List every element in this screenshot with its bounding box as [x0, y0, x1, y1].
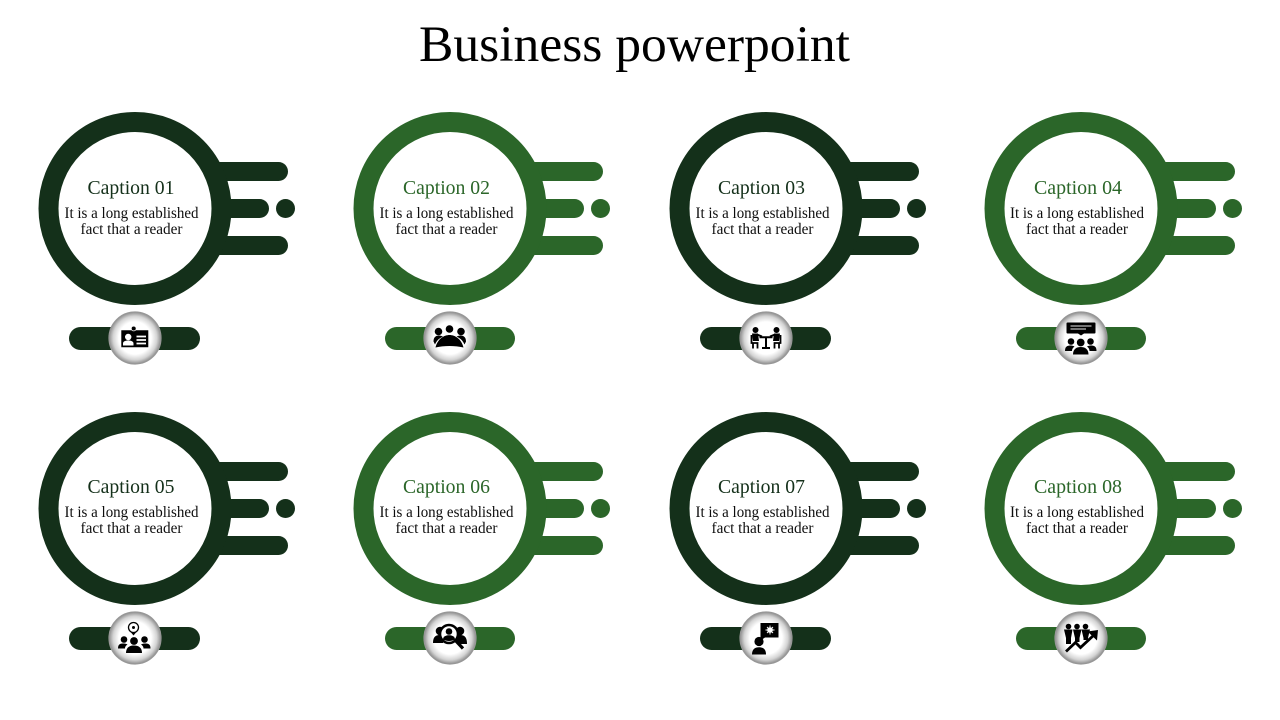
pill	[385, 327, 515, 350]
panel: caption 05	[48, 422, 295, 664]
heading: Caption 03	[718, 177, 805, 199]
panel: caption 04	[994, 122, 1242, 364]
text block	[696, 205, 830, 238]
ring	[994, 422, 1168, 595]
title: Business powerpoint	[419, 17, 850, 73]
panel: caption 08	[994, 422, 1242, 664]
icon badge	[740, 312, 792, 364]
icon: people search	[433, 625, 467, 648]
text block: fact that a reader	[396, 221, 498, 238]
text block	[64, 205, 199, 238]
icon badge	[424, 312, 476, 364]
text block: It is a long established	[380, 205, 514, 222]
icon badge	[740, 612, 792, 664]
text block: It is a long established	[64, 504, 199, 521]
text block: fact that a reader	[712, 520, 814, 537]
heading: Caption 07	[718, 476, 805, 498]
text block: fact that a reader	[1026, 221, 1129, 238]
pill	[1016, 627, 1146, 650]
heading: Caption 06	[403, 476, 490, 498]
heading: Caption 01	[88, 177, 174, 199]
icon: audience	[434, 325, 466, 348]
icon badge	[109, 312, 161, 364]
text block	[64, 504, 199, 537]
text block: It is a long established	[380, 504, 514, 521]
ring	[364, 122, 536, 295]
ring	[680, 422, 852, 595]
icon: group with speech board	[1065, 322, 1096, 354]
panel: caption 07	[680, 422, 926, 664]
text block: It is a long established	[696, 504, 830, 521]
ring	[680, 122, 852, 295]
connector bars	[195, 462, 295, 555]
panel: caption 06	[364, 422, 610, 664]
icon badge	[424, 612, 476, 664]
icon: person with idea bubble	[752, 623, 778, 654]
connector bars	[195, 162, 295, 255]
text block	[1010, 205, 1144, 238]
text block	[380, 504, 514, 537]
pill	[1016, 327, 1146, 350]
icon badge	[1055, 312, 1107, 364]
icon: team growth arrow	[1064, 624, 1098, 652]
connector bars	[826, 162, 926, 255]
text block: It is a long established	[1010, 504, 1144, 521]
text block	[380, 205, 514, 238]
text block: fact that a reader	[396, 520, 498, 537]
panel: caption 03	[680, 122, 926, 364]
text block: fact that a reader	[80, 221, 183, 238]
heading: Caption 05	[88, 476, 174, 498]
connector bars	[510, 162, 610, 255]
icon: meeting at table	[752, 327, 780, 348]
text block: It is a long established	[64, 205, 199, 222]
icon badge	[1055, 612, 1107, 664]
heading: Caption 02	[403, 177, 490, 199]
text block	[1010, 504, 1144, 537]
text block: fact that a reader	[1026, 520, 1129, 537]
panel: caption 01	[48, 122, 295, 364]
ring	[48, 422, 222, 595]
pill	[700, 627, 831, 650]
text block: fact that a reader	[712, 221, 814, 238]
ring	[48, 122, 222, 295]
pill	[69, 327, 200, 350]
text block	[696, 504, 830, 537]
panel: caption 02	[364, 122, 610, 364]
text block: It is a long established	[1010, 205, 1144, 222]
connector bars	[1141, 462, 1242, 555]
pill	[69, 627, 200, 650]
connector bars	[826, 462, 926, 555]
connector bars	[1141, 162, 1242, 255]
icon: id card	[121, 326, 148, 347]
ring	[994, 122, 1168, 295]
heading: Caption 08	[1034, 476, 1122, 498]
heading: Caption 04	[1034, 177, 1122, 199]
ring	[364, 422, 536, 595]
text block: fact that a reader	[80, 520, 183, 537]
icon: group with idea bulb	[118, 622, 150, 653]
pill	[700, 327, 831, 350]
text block: It is a long established	[696, 205, 830, 222]
icon badge	[109, 612, 161, 664]
pill	[385, 627, 515, 650]
connector bars	[510, 462, 610, 555]
